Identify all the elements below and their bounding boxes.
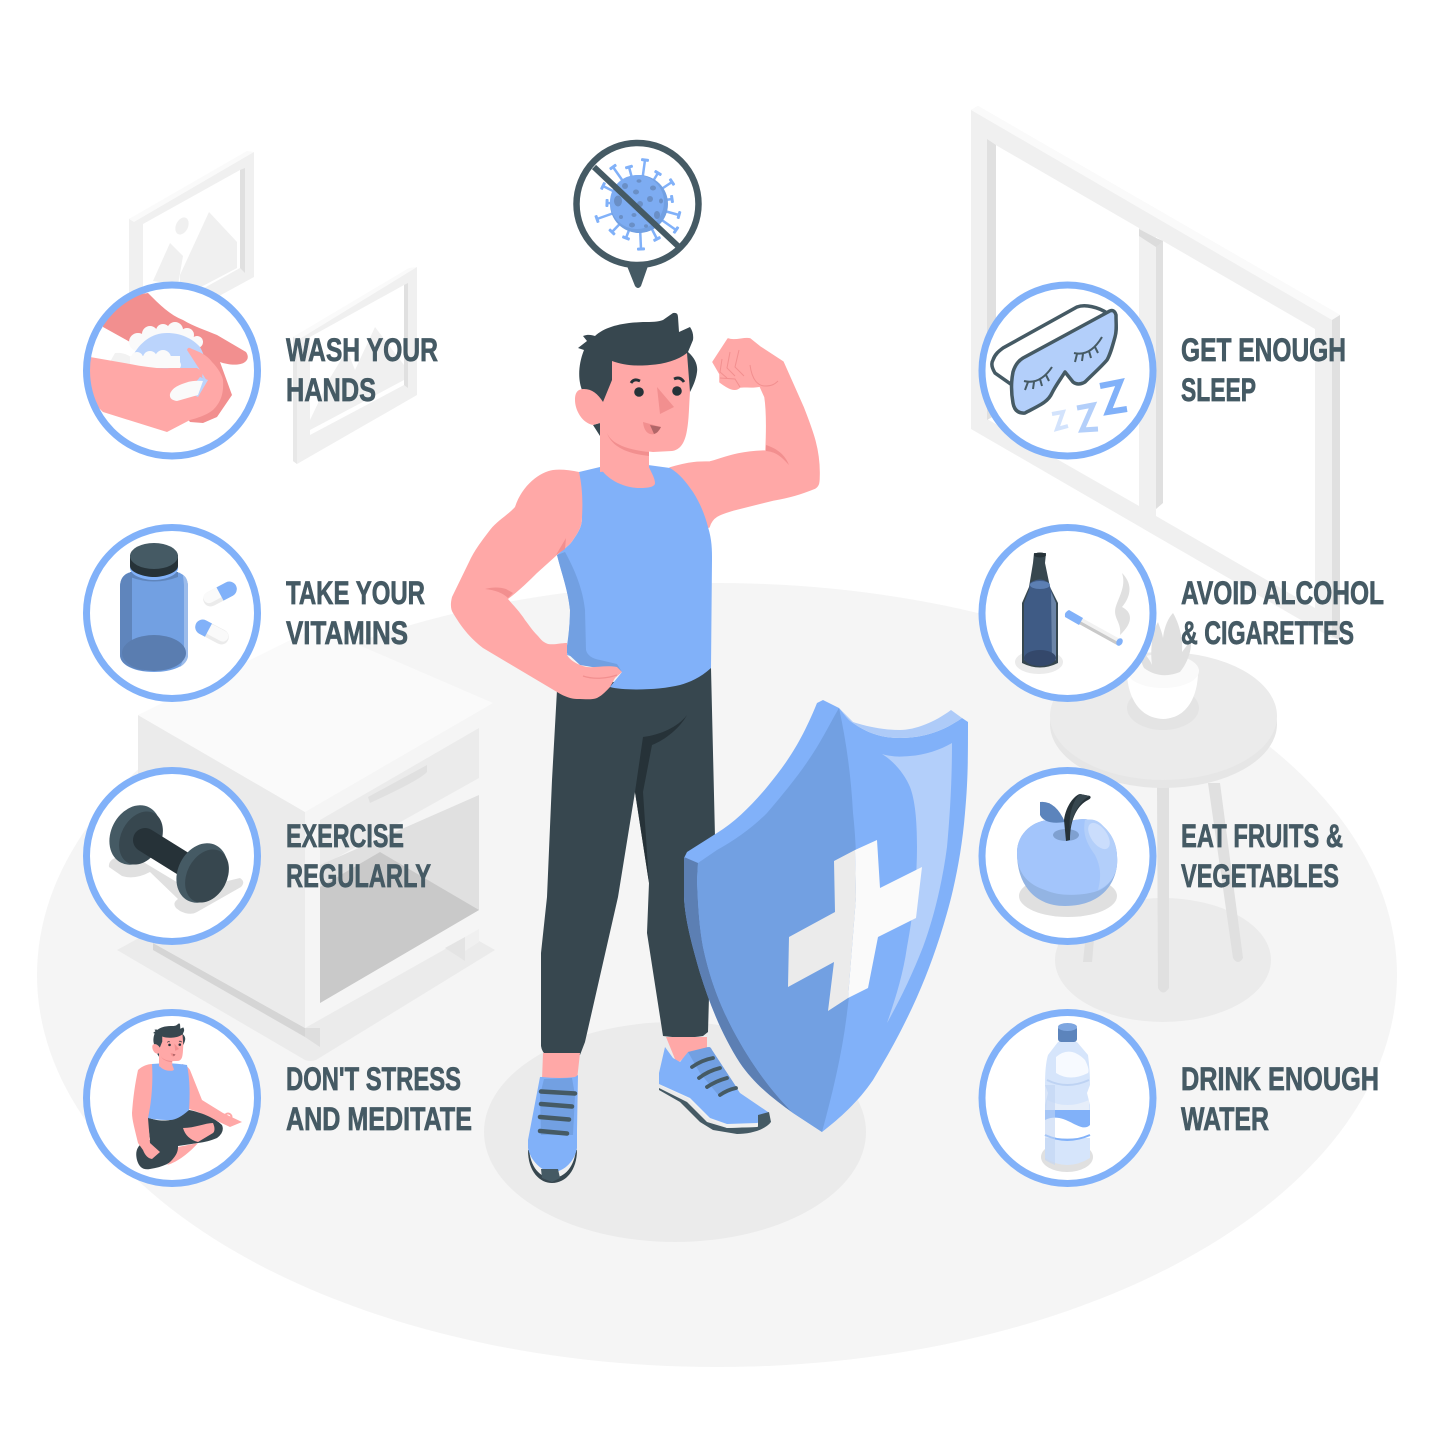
background: picture frame top <box>129 151 254 345</box>
panel: take your vitamins <box>86 528 425 698</box>
label: GET ENOUGH <box>1181 332 1346 368</box>
shield rim <box>684 700 968 1132</box>
panel: wash your hands <box>80 285 438 456</box>
right shoe <box>659 1047 771 1134</box>
circle ring <box>86 1012 258 1184</box>
shield shaded face <box>697 708 856 1132</box>
background: wall window <box>971 106 1340 640</box>
head <box>575 313 697 488</box>
panel: get enough sleep <box>982 285 1346 456</box>
icon: capsule one <box>201 579 239 609</box>
icon: bubble circle <box>576 143 698 265</box>
label: AND MEDITATE <box>286 1101 472 1137</box>
icon: washing hands <box>90 289 248 432</box>
label: VITAMINS <box>286 615 408 651</box>
circle ring <box>86 285 258 456</box>
floor ellipse <box>37 583 1397 1367</box>
circle ring <box>86 528 258 698</box>
label: DON'T STRESS <box>286 1061 461 1097</box>
panel: don't stress and meditate <box>86 1012 472 1184</box>
background: picture frame bottom <box>293 267 417 464</box>
icon: sleep mask <box>992 306 1116 413</box>
label <box>286 818 431 894</box>
shield reflection <box>882 743 952 1023</box>
icon: meditating person <box>132 1024 242 1169</box>
label: REGULARLY <box>286 858 431 894</box>
bent arm <box>451 470 622 699</box>
pants <box>541 668 715 1056</box>
circle ring <box>982 1012 1153 1184</box>
label: & CIGARETTES <box>1181 615 1354 651</box>
label: EAT FRUITS & <box>1181 818 1343 854</box>
panel: exercise regularly <box>86 770 431 942</box>
label <box>1181 332 1346 408</box>
icon: virus <box>597 160 679 249</box>
label: TAKE YOUR <box>286 575 425 611</box>
label: VEGETABLES <box>1181 858 1339 894</box>
icon: cigarette <box>1065 573 1130 647</box>
label <box>1181 575 1384 651</box>
icon: prohibition slash <box>594 167 679 247</box>
background: side table with plant <box>1050 613 1277 1022</box>
panel: drink enough water <box>982 1012 1379 1184</box>
circle ring <box>86 770 258 942</box>
tank top <box>557 465 712 689</box>
character floor shadow <box>484 1022 866 1242</box>
label: EXERCISE <box>286 818 404 854</box>
shield top light rim <box>839 708 962 738</box>
no-virus speech bubble <box>576 143 698 288</box>
label <box>286 332 438 408</box>
circle ring <box>982 285 1153 456</box>
panel: avoid alcohol and cigarettes <box>982 528 1384 698</box>
background: nightstand <box>117 627 495 1061</box>
icon: capsule two <box>193 617 231 647</box>
ankles <box>542 1037 707 1080</box>
label <box>286 575 425 651</box>
icon: water bottle <box>1041 1023 1093 1172</box>
icon: z letters <box>1052 382 1127 430</box>
label <box>286 1061 472 1137</box>
shield dark side edge <box>684 857 822 1132</box>
circle ring <box>982 770 1153 942</box>
flexed arm <box>670 339 819 530</box>
label: WASH YOUR <box>286 332 438 368</box>
shield <box>684 700 968 1132</box>
circle ring <box>982 528 1153 698</box>
label <box>1181 1061 1379 1137</box>
medical cross <box>788 840 922 1011</box>
label: SLEEP <box>1181 372 1256 408</box>
icon: bubble tail <box>627 266 648 288</box>
icon: apple <box>1017 794 1117 917</box>
label <box>1181 818 1343 894</box>
icon: vitamin jar <box>120 543 188 672</box>
main character <box>451 313 819 1183</box>
label: WATER <box>1181 1101 1269 1137</box>
icon: dumbbell <box>100 796 243 914</box>
label: DRINK ENOUGH <box>1181 1061 1379 1097</box>
label: HANDS <box>286 372 376 408</box>
left shoe <box>528 1075 578 1183</box>
icon: bottle <box>1015 552 1063 674</box>
panel: eat fruits and vegetables <box>982 770 1343 942</box>
